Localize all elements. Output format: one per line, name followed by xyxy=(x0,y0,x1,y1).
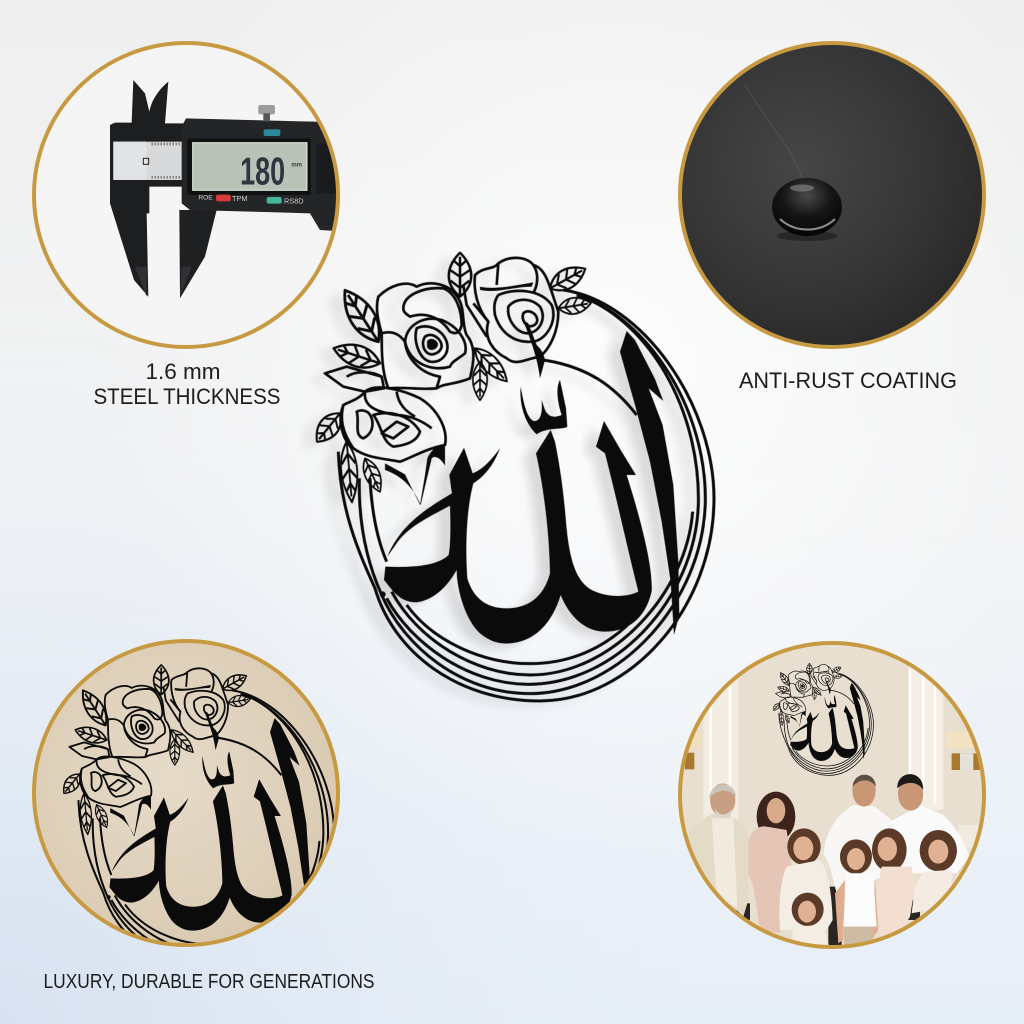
mother xyxy=(748,792,795,933)
icon: digital caliper xyxy=(110,80,347,298)
main artwork: floral calligraphy wall art xyxy=(297,253,714,706)
grandfather xyxy=(687,783,748,917)
family members xyxy=(687,774,969,950)
icon: water droplet xyxy=(745,85,842,241)
icon: digital caliper: ROE xyxy=(198,194,213,201)
panel: family in room with wall art xyxy=(680,640,990,950)
panel: artwork close-up on plaster wall xyxy=(34,641,338,970)
miniature wall art xyxy=(772,663,873,775)
icon: wall sconces xyxy=(685,732,980,770)
standing men xyxy=(823,774,969,893)
caption: luxury durable: LUXURY, DURABLE FOR GENERATIONS xyxy=(44,971,374,993)
caption: steel thickness: 1.6 mm xyxy=(146,359,220,384)
panel: steel thickness caliper photo xyxy=(34,43,347,347)
wall panels xyxy=(704,666,979,848)
caption: steel thickness xyxy=(94,359,280,409)
icon: digital caliper: TPM xyxy=(232,194,247,203)
icon: digital caliper: RS8D xyxy=(284,196,304,205)
girls xyxy=(779,828,957,950)
trousers and shadows xyxy=(737,887,920,950)
icon: digital caliper: mm xyxy=(291,163,302,169)
caption: steel thickness: STEEL THICKNESS xyxy=(94,384,280,409)
caption: anti-rust coating: ANTI-RUST COATING xyxy=(739,368,957,393)
lcd reading: 180 xyxy=(240,150,285,194)
panel: anti-rust coating droplet xyxy=(680,43,984,347)
